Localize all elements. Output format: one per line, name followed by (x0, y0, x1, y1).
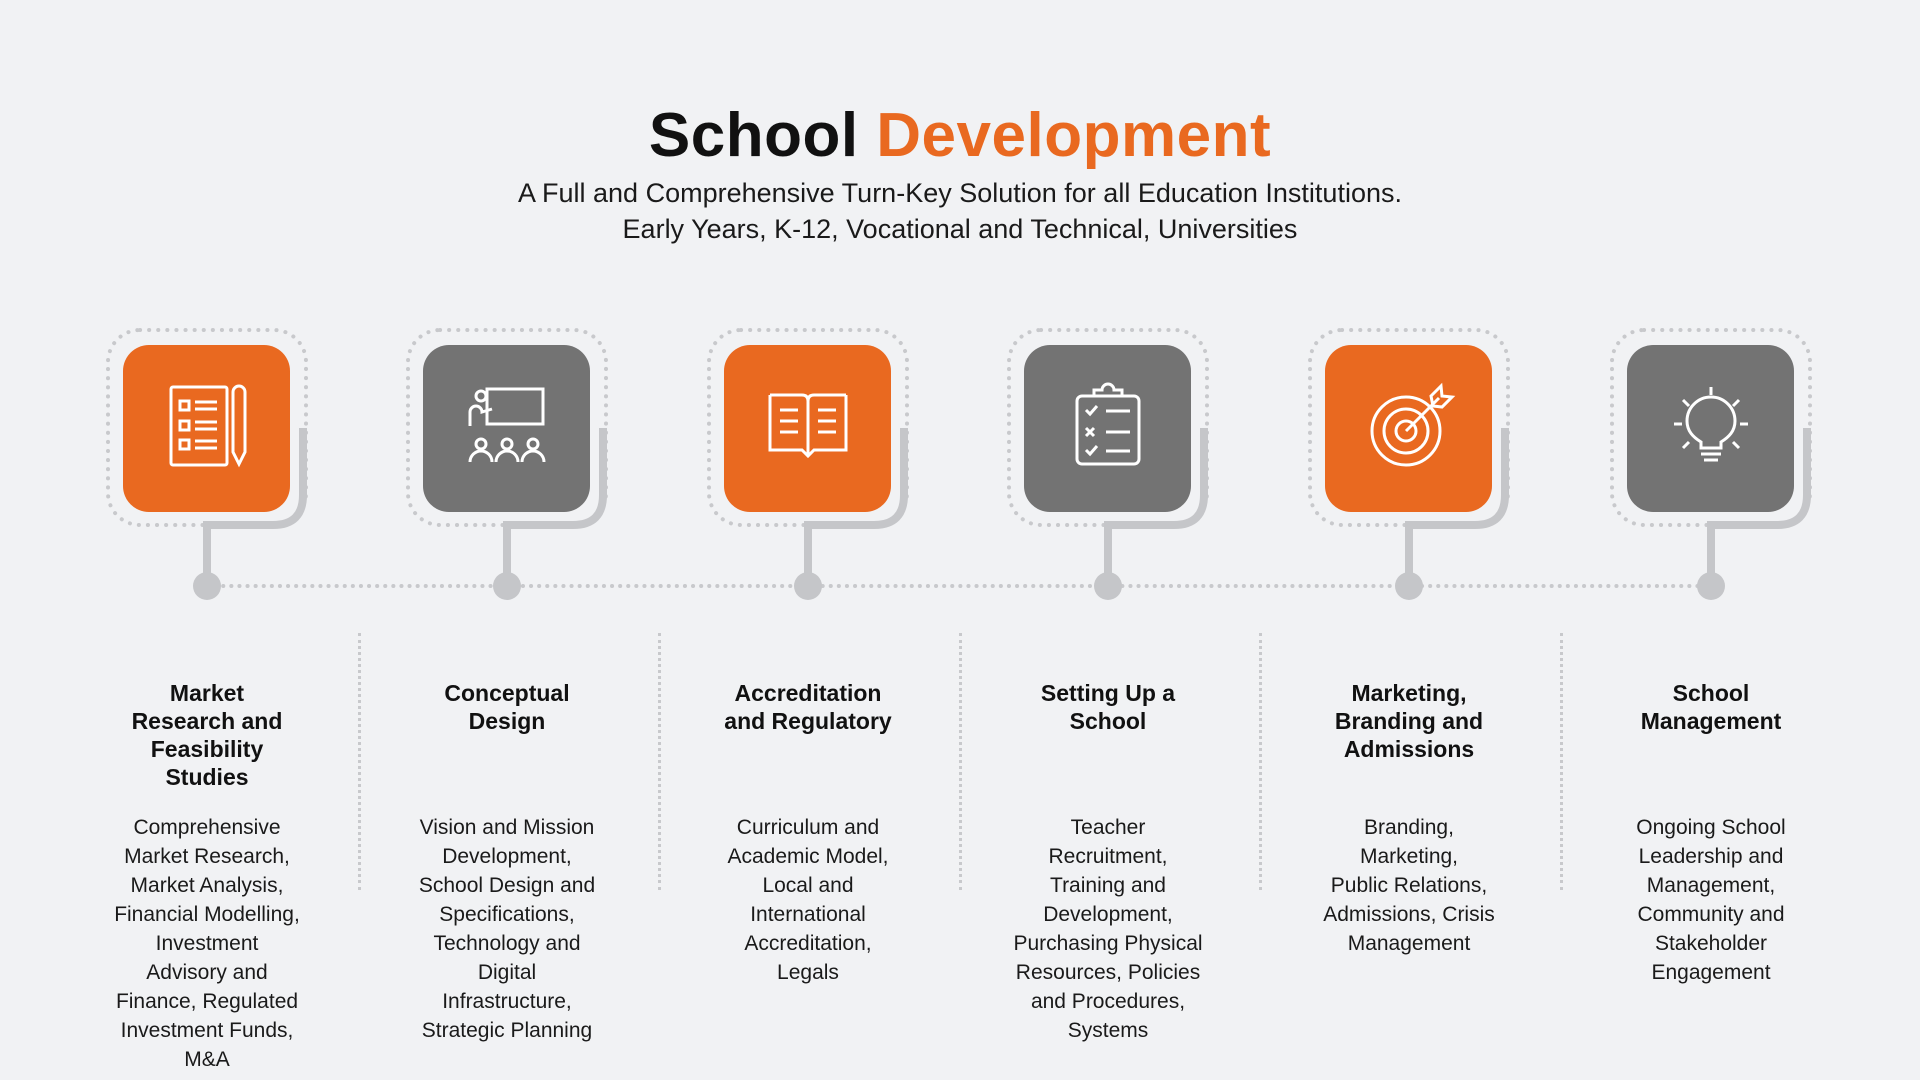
column 6 text: Management, (1647, 874, 1775, 897)
column 3 text: Local and (762, 874, 854, 897)
column 2 text: Infrastructure, (442, 990, 572, 1013)
column 3 text: and Regulatory (724, 708, 892, 734)
column 1 text: Finance, Regulated (116, 990, 298, 1013)
card 6 (1612, 330, 1810, 600)
column 4 text: Recruitment, (1048, 845, 1168, 868)
column 5 text (1323, 680, 1495, 955)
icon: checklist and pencil (171, 386, 245, 465)
column 1 text: Market (170, 680, 244, 706)
column 6 text: Management (1641, 708, 1781, 734)
card 1 (108, 330, 306, 600)
column 6 text: Leadership and (1639, 845, 1783, 868)
card 4 (1009, 330, 1207, 600)
column 1 text (114, 680, 300, 1071)
icon: target with arrow (1372, 386, 1452, 465)
column 4 text: Setting Up a (1041, 680, 1175, 706)
column 5 text: Admissions, Crisis (1323, 903, 1495, 926)
column 2 text (419, 680, 595, 1042)
column 3 text: Curriculum and (737, 816, 879, 839)
column 1 text: Market Analysis, (131, 874, 283, 897)
icon: lightbulb (1674, 387, 1748, 460)
column 3 text: International (750, 903, 866, 926)
column 1 text: Market Research, (124, 845, 290, 868)
column 1 text: Investment Funds, (121, 1019, 293, 1042)
column 1 text: Advisory and (146, 961, 268, 984)
column 2 text: Vision and Mission (420, 816, 594, 839)
column 2 text: Conceptual (444, 680, 570, 706)
column 6 text: Community and (1637, 903, 1785, 926)
column 5 text: Branding and (1335, 708, 1483, 734)
column 1 text: M&A (184, 1048, 230, 1071)
column 3 text (724, 680, 892, 984)
column 5 text: Public Relations, (1331, 874, 1487, 897)
column 6 text: Stakeholder (1655, 932, 1767, 955)
column 2 text: Specifications, (439, 903, 575, 926)
timeline graphic (106, 328, 1812, 600)
column 2 text: Digital (478, 961, 536, 984)
column 4 text: and Procedures, (1031, 990, 1185, 1013)
column 4 text (1013, 680, 1203, 1042)
column 3 text: Accreditation, (744, 932, 872, 955)
column 2 text: Development, (442, 845, 572, 868)
column 4 text: Systems (1068, 1019, 1148, 1042)
icon: open book (770, 395, 846, 456)
column 4 text: Resources, Policies (1016, 961, 1200, 984)
column 2 text: Design (469, 708, 545, 734)
column 4 text: Training and (1050, 874, 1166, 897)
column 1 text: Financial Modelling, (114, 903, 300, 926)
column 4 text: Teacher (1071, 816, 1145, 839)
column 4 text: Development, (1043, 903, 1173, 926)
column 5 text: Admissions (1344, 736, 1474, 762)
column 3 text: Academic Model, (727, 845, 889, 868)
column 2 text: Technology and (433, 932, 581, 955)
card 3 (709, 330, 907, 600)
dividers (358, 633, 1563, 890)
column 5 text: Management (1348, 932, 1470, 955)
icon: teacher and students (470, 389, 544, 462)
column 3 text: Legals (777, 961, 839, 984)
icon: clipboard (1077, 384, 1139, 464)
column 2 text: School Design and (419, 874, 595, 897)
column 5 text: Marketing, (1351, 680, 1467, 706)
column 5 text: Branding, (1364, 816, 1454, 839)
column 6 text (1636, 680, 1786, 984)
card 5 (1310, 330, 1508, 600)
column 5 text: Marketing, (1360, 845, 1458, 868)
title: School Development (649, 101, 1271, 170)
column 1 text: Research and (132, 708, 282, 734)
subtitle (518, 178, 1402, 244)
card 2 (408, 330, 606, 600)
column 3 text: Accreditation (734, 680, 881, 706)
column 1 text: Studies (165, 764, 249, 790)
column 6 text: Engagement (1651, 961, 1771, 984)
column 6 text: School (1673, 680, 1749, 706)
column 4 text: School (1070, 708, 1146, 734)
column 6 text: Ongoing School (1636, 816, 1786, 839)
column 1 text: Comprehensive (133, 816, 281, 839)
column 4 text: Purchasing Physical (1013, 932, 1203, 955)
subtitle: Early Years, K-12, Vocational and Technical, Universities (623, 214, 1297, 244)
column 1 text: Investment (156, 932, 258, 955)
subtitle: A Full and Comprehensive Turn-Key Solution for all Education Institutions. (518, 178, 1402, 208)
column 1 text: Feasibility (151, 736, 263, 762)
column 2 text: Strategic Planning (422, 1019, 592, 1042)
